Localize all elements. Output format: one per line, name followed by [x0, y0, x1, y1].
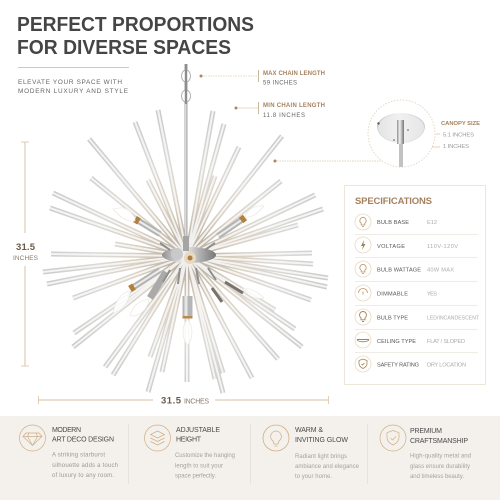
title — [17, 13, 254, 59]
title rule — [18, 67, 129, 68]
icon: light bulb — [263, 425, 289, 451]
row: bulb base: E12 — [427, 220, 437, 226]
feature: warm glow — [263, 425, 360, 480]
feature: warm glow: Radiant light brings — [295, 454, 347, 460]
width dimension: 31.5 — [161, 396, 182, 406]
feature: adjustable height: length to suit your — [175, 464, 223, 470]
feature: art deco design — [20, 425, 118, 479]
row: safety rating — [355, 356, 466, 372]
feature: art deco design: ART DECO DESIGN — [52, 436, 114, 444]
row: bulb wattage: BULB WATTAGE — [377, 268, 421, 274]
row: bulb wattage: 40W MAX — [427, 268, 454, 274]
row: bulb base — [355, 214, 437, 230]
row: ceiling type: CEILING TYPE — [377, 339, 416, 345]
row: bulb wattage — [355, 261, 454, 277]
feature: art deco design: of luxury to any room. — [52, 473, 114, 479]
canopy size label: 1 INCHES — [443, 144, 469, 150]
title: PERFECT PROPORTIONS — [17, 13, 254, 36]
max chain callout: 59 INCHES — [263, 80, 297, 86]
column dividers — [128, 424, 368, 484]
feature: adjustable height: Customize the hanging — [175, 453, 235, 459]
feature: art deco design: MODERN — [52, 427, 81, 434]
feature: premium craftsmanship: CRAFTSMANSHIP — [410, 438, 468, 445]
feature: adjustable height: HEIGHT — [176, 436, 202, 444]
row: safety rating: SAFETY RATING — [377, 362, 419, 368]
min chain callout — [234, 102, 325, 119]
canopy size label: 5.1 INCHES — [443, 132, 474, 138]
feature: warm glow: WARM & — [295, 427, 323, 434]
candle sockets — [130, 218, 245, 318]
chain and stem — [182, 64, 190, 256]
row: bulb type: LED/INCANDESCENT — [427, 316, 479, 322]
row: voltage: 110V-120V — [427, 244, 458, 250]
height dimension: 31.5 — [16, 242, 36, 253]
feature: premium craftsmanship: and timeless beauty. — [410, 474, 464, 480]
row: ceiling type — [355, 332, 465, 348]
feature: premium craftsmanship: High-quality metal and — [410, 454, 471, 460]
row: safety rating: DRY LOCATION — [427, 362, 466, 368]
feature: premium craftsmanship: glass ensure durability — [410, 464, 470, 470]
subtitle: MODERN LUXURY AND STYLE — [18, 88, 128, 95]
icon: shield — [380, 425, 406, 451]
feature: adjustable height: space perfectly. — [175, 474, 216, 480]
feature: warm glow: to your home. — [295, 474, 332, 480]
canopy leader — [274, 160, 381, 162]
title: FOR DIVERSE SPACES — [17, 36, 231, 59]
row dividers — [355, 234, 478, 353]
canopy size label — [432, 121, 480, 150]
row: dimmable: YES — [427, 292, 437, 298]
specifications heading: SPECIFICATIONS — [355, 196, 432, 207]
candle bulbs — [113, 206, 264, 346]
feature: adjustable height: ADJUSTABLE — [176, 427, 220, 434]
feature: premium craftsmanship: PREMIUM — [410, 428, 442, 435]
max chain callout — [200, 70, 325, 86]
canopy detail — [368, 100, 435, 167]
feature: adjustable height — [144, 425, 235, 480]
canopy size label: CANOPY SIZE — [441, 121, 480, 127]
panel: features band — [0, 416, 500, 500]
row: ceiling type: FLAT / SLOPED — [427, 339, 465, 345]
feature: art deco design: silhouette adds a touch — [52, 463, 118, 469]
min chain callout: 11.8 INCHES — [263, 113, 305, 119]
glass rods — [43, 110, 328, 393]
feature: warm glow: INVITING GLOW — [295, 437, 348, 444]
row: dimmable — [355, 285, 437, 301]
panel: specifications — [344, 186, 486, 384]
height dimension: INCHES — [13, 255, 39, 262]
central hub — [160, 236, 216, 284]
row: dimmable: DIMMABLE — [377, 292, 408, 298]
min chain callout: MIN CHAIN LENGTH — [263, 103, 325, 109]
row: voltage: VOLTAGE — [377, 244, 405, 250]
icon: diamond — [20, 425, 46, 451]
height dimension — [13, 142, 39, 366]
feature: premium craftsmanship — [380, 425, 471, 480]
width dimension — [38, 396, 328, 406]
row: bulb type — [355, 309, 479, 325]
max chain callout: MAX CHAIN LENGTH — [263, 71, 325, 77]
row: bulb base: BULB BASE — [377, 220, 409, 226]
width dimension: INCHES — [184, 398, 209, 406]
row: voltage — [355, 237, 458, 253]
chandelier — [43, 64, 328, 393]
icon: layers — [144, 425, 170, 451]
feature: art deco design: A striking starburst — [52, 452, 105, 458]
feature: warm glow: ambiance and elegance — [295, 464, 360, 470]
row: bulb type: BULB TYPE — [377, 316, 408, 322]
subtitle — [18, 79, 128, 95]
subtitle: ELEVATE YOUR SPACE WITH — [18, 79, 122, 86]
